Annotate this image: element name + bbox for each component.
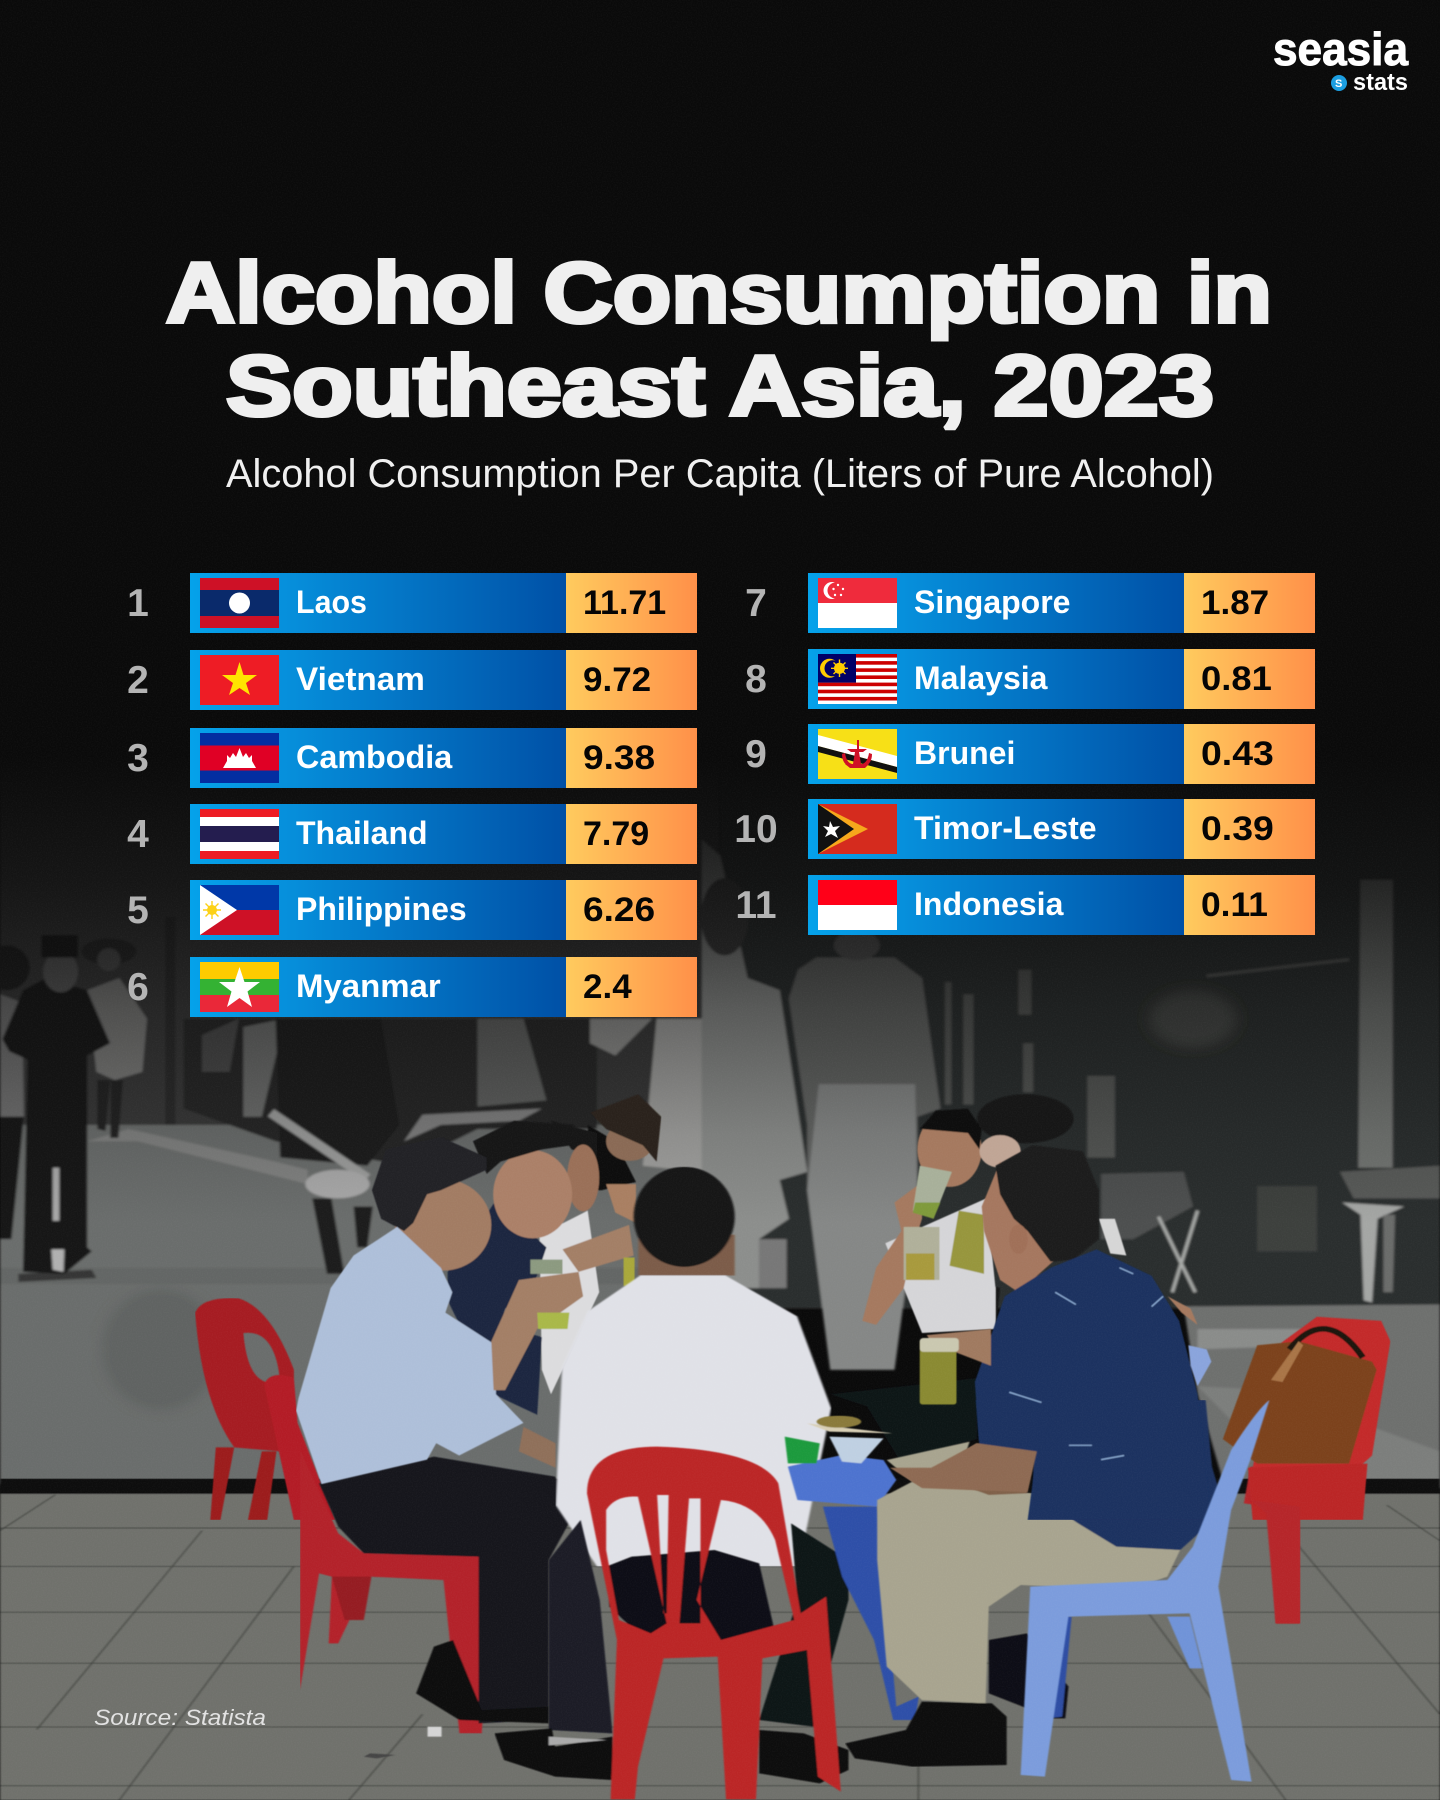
man in light blue shirt xyxy=(296,1137,583,1484)
table, white-shirt man legs, black bag and front red chair xyxy=(495,1416,919,1799)
man with cap at back xyxy=(588,1094,661,1223)
subtitle: Alcohol Consumption Per Capita (Liters of Pure Alcohol) xyxy=(226,452,1214,496)
row: Laos: 11.71 xyxy=(583,584,666,622)
rank 1: 1 xyxy=(127,582,149,625)
mural: rickshaw puller xyxy=(271,1019,542,1274)
row: Laos: Laos xyxy=(296,584,367,620)
source: Source: Statista xyxy=(94,1705,266,1730)
row: Thailand: 7.79 xyxy=(583,815,649,853)
flag: Timor-Leste xyxy=(818,804,897,854)
rank 2: 2 xyxy=(127,659,149,702)
mural wall right half xyxy=(701,741,1440,1488)
row: Thailand: Thailand xyxy=(296,815,428,851)
brown leather bag xyxy=(1223,1329,1377,1464)
rank 9: 9 xyxy=(745,733,767,776)
row: Indonesia: 0.11 xyxy=(1201,886,1268,924)
row: Vietnam: 9.72 xyxy=(583,661,651,699)
row: Philippines: 6.26 xyxy=(583,891,655,929)
legs of left man, left chair and rear chair xyxy=(300,1450,1300,1733)
dishes on table xyxy=(785,1416,893,1463)
row: Indonesia xyxy=(808,875,1315,935)
row: Cambodia: 9.38 xyxy=(583,739,655,777)
mural: two women in ao dai xyxy=(701,839,940,1370)
flag: Brunei xyxy=(818,729,897,779)
rank 11: 11 xyxy=(735,884,777,927)
row: Philippines xyxy=(190,880,697,940)
row: Singapore: Singapore xyxy=(914,584,1070,620)
flag: Thailand xyxy=(200,809,279,859)
man in white shirt seen from behind xyxy=(556,1167,831,1566)
row: Vietnam: Vietnam xyxy=(296,661,425,697)
rank 8: 8 xyxy=(745,658,767,701)
rank 6: 6 xyxy=(127,966,149,1009)
front red chair xyxy=(587,1447,841,1799)
man in navy shirt with khaki trousers xyxy=(845,1400,1225,1767)
logo: seasia stats: S xyxy=(1335,78,1342,90)
beer glass held by left man xyxy=(530,1260,569,1329)
mural: man in black xyxy=(2,935,110,1274)
row: Brunei xyxy=(808,724,1315,784)
row: Brunei: Brunei xyxy=(914,735,1015,771)
row: Brunei: 0.43 xyxy=(1201,735,1274,773)
drinking glasses xyxy=(904,1166,984,1280)
title: Southeast Asia, 2023 xyxy=(226,339,1214,434)
rank 7: 7 xyxy=(745,582,767,625)
back red chair left xyxy=(195,1298,335,1520)
row: Thailand xyxy=(190,804,697,864)
row: Myanmar xyxy=(190,957,697,1017)
title xyxy=(166,246,1272,434)
row: Philippines: Philippines xyxy=(296,891,467,927)
flag: Indonesia xyxy=(818,880,897,930)
row: Laos xyxy=(190,573,697,633)
mural: far left figure xyxy=(0,945,30,1239)
held beer mug xyxy=(920,1338,959,1404)
title: Alcohol Consumption in xyxy=(166,246,1272,341)
row: Timor-Leste: 0.39 xyxy=(1201,810,1274,848)
left group of men xyxy=(296,1094,661,1484)
red chair behind bag xyxy=(1253,1317,1390,1472)
row: Myanmar: Myanmar xyxy=(296,968,441,1004)
row: Singapore xyxy=(808,573,1315,633)
flag: Myanmar xyxy=(200,962,279,1012)
black bag xyxy=(606,1550,775,1643)
row: Vietnam xyxy=(190,650,697,710)
mural wall left half xyxy=(0,741,720,1484)
flag: Philippines xyxy=(200,885,279,935)
third man face and white shirt xyxy=(540,1121,599,1394)
mural: pillar and urn xyxy=(1340,880,1440,1302)
man in navy shirt upper body, beer, brown bag xyxy=(890,1145,1390,1520)
row: Indonesia: Indonesia xyxy=(914,886,1063,922)
flag: Laos xyxy=(200,578,279,628)
flag: Cambodia xyxy=(200,733,279,783)
right back men xyxy=(830,1094,1198,1460)
row: Cambodia: Cambodia xyxy=(296,739,452,775)
rank 4: 4 xyxy=(127,813,149,856)
logo: seasia stats: seasia xyxy=(1273,23,1408,75)
row: Malaysia xyxy=(808,649,1315,709)
pavement floor xyxy=(0,1479,1440,1800)
row: Singapore: 1.87 xyxy=(1201,584,1269,622)
flag: Malaysia xyxy=(818,654,897,704)
rank 5: 5 xyxy=(127,889,149,932)
row: Timor-Leste xyxy=(808,799,1315,859)
blue plastic chair xyxy=(364,1400,1300,1782)
flag: Vietnam xyxy=(200,655,279,705)
logo: seasia stats: stats xyxy=(1353,69,1408,96)
row: Cambodia xyxy=(190,728,697,788)
rank 3: 3 xyxy=(127,737,149,780)
row: Malaysia: 0.81 xyxy=(1201,660,1272,698)
row: Timor-Leste: Timor-Leste xyxy=(914,810,1097,846)
man in navy polo xyxy=(448,1121,574,1415)
flag: Singapore xyxy=(818,578,897,628)
rank 10: 10 xyxy=(734,808,778,851)
mural: woman with conical hat xyxy=(81,938,147,1138)
logo: seasia stats xyxy=(1273,23,1408,96)
row: Myanmar: 2.4 xyxy=(583,968,632,1006)
row: Malaysia: Malaysia xyxy=(914,660,1047,696)
